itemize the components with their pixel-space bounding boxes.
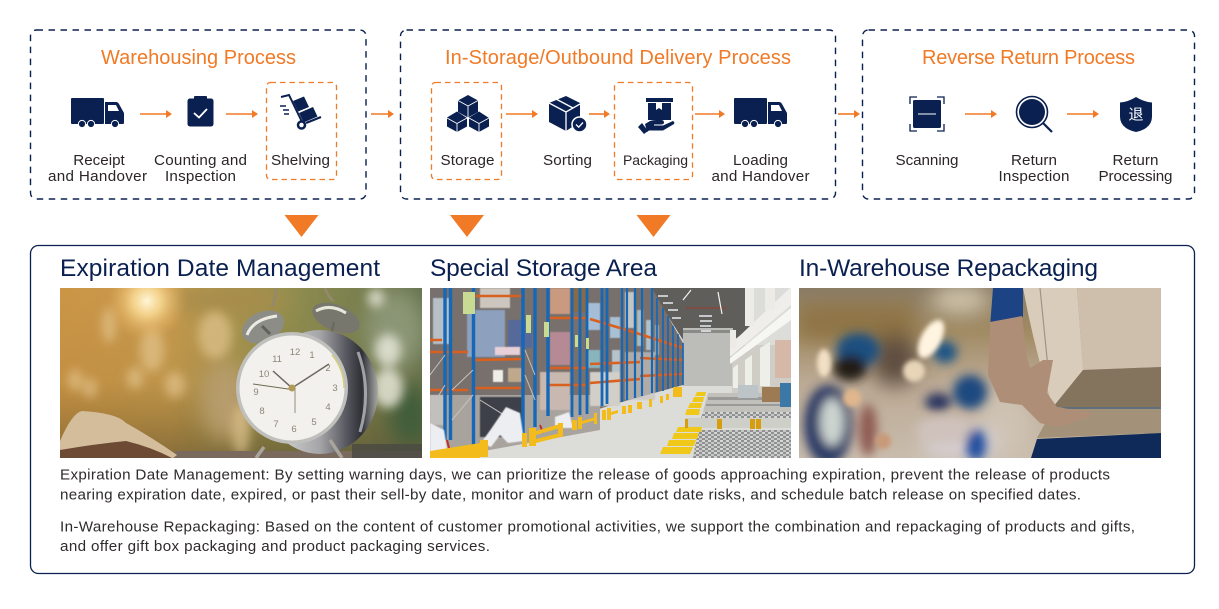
clock numerals: 4 bbox=[325, 402, 331, 413]
right balcony bbox=[730, 287, 791, 393]
text: in-warehouse repackaging: and offer gift box packaging and product packaging services. bbox=[60, 538, 490, 555]
photo: warehouse racks bbox=[430, 287, 791, 458]
red bases and shadow bbox=[447, 425, 543, 452]
icon: hand with box bbox=[638, 98, 674, 134]
label: receipt: Receipt bbox=[73, 152, 126, 169]
clock numerals: 6 bbox=[291, 424, 297, 435]
text: expiration date management: nearing expiration date, expired, or past their sell-by date, monitor and warn of product date risks, and schedule batch release on specified dates. bbox=[60, 486, 1081, 504]
burlap sack bbox=[60, 411, 177, 458]
arm and hand bbox=[988, 316, 1090, 427]
icon: clipboard check bbox=[188, 96, 214, 126]
table edge bbox=[175, 451, 352, 458]
text: in-warehouse repackaging: In-Warehouse Repackaging: Based on the content of customer promotional activities, we support the combination and repackaging of products and gifts, bbox=[60, 518, 1135, 536]
clock numerals: 9 bbox=[253, 387, 259, 398]
rack lattice bbox=[430, 350, 535, 425]
box bbox=[1023, 288, 1161, 438]
arrow bbox=[1067, 110, 1099, 118]
arrow bbox=[589, 110, 610, 118]
label: inspection: Inspection bbox=[165, 168, 236, 185]
rack signs bbox=[463, 292, 589, 349]
clock numerals: 11 bbox=[272, 354, 282, 365]
icon: scanner bbox=[910, 97, 944, 131]
highlight: storage bbox=[432, 82, 502, 180]
panel: value-added services bbox=[30, 246, 1194, 574]
clock numerals: 5 bbox=[311, 417, 317, 428]
label: loading: Loading bbox=[733, 152, 788, 169]
text: expiration date management: Expiration Date Management: By setting warning days, we can prioritize the release of goods approaching expiration, prevent the release of products bbox=[60, 466, 1110, 484]
clock numerals: 10 bbox=[259, 369, 269, 380]
yellow guards bbox=[430, 387, 682, 458]
label: return: Return bbox=[1112, 152, 1158, 169]
icon: shield return bbox=[1120, 97, 1152, 132]
label: packaging: Packaging bbox=[623, 152, 688, 168]
label: storage: Storage bbox=[440, 152, 494, 169]
label: inspection: Inspection bbox=[998, 168, 1070, 185]
clock numerals: 8 bbox=[259, 406, 265, 417]
arrow bbox=[140, 110, 172, 118]
pallet goods bbox=[430, 288, 659, 437]
label: counting: Counting and bbox=[154, 152, 247, 169]
text: in-warehouse repackaging bbox=[60, 518, 1135, 555]
rack mass bbox=[430, 288, 683, 408]
icon: magnifier bbox=[1016, 96, 1052, 132]
icon: box check bbox=[549, 96, 587, 132]
clock numerals: 1 bbox=[309, 350, 315, 361]
icon: cubes bbox=[447, 95, 489, 132]
arrow: to reverse return bbox=[838, 110, 860, 118]
panel: in-storage outbound bbox=[400, 30, 836, 199]
clock numerals bbox=[253, 347, 338, 435]
pointer: storage bbox=[450, 215, 484, 237]
label: and handover: and Handover bbox=[48, 168, 147, 185]
arrow bbox=[506, 110, 538, 118]
label: scanning: Scanning bbox=[896, 152, 958, 169]
plastic wrap bbox=[430, 407, 573, 455]
trousers bbox=[1031, 433, 1161, 458]
arrow bbox=[226, 110, 258, 118]
icon: truck loading bbox=[734, 98, 787, 128]
label: processing: Processing bbox=[1098, 168, 1172, 185]
panel: reverse return bbox=[862, 30, 1194, 199]
photo: worker carrying box bbox=[799, 286, 1161, 465]
pointer: packaging bbox=[636, 215, 670, 237]
label: shelving: Shelving bbox=[271, 152, 330, 169]
icon: shield return: 退 bbox=[1128, 106, 1144, 124]
icon: truck receipt bbox=[71, 98, 124, 128]
arrow: to in-storage bbox=[371, 110, 394, 118]
blue uprights bbox=[445, 288, 683, 445]
title: expiration: Expiration Date Management bbox=[60, 255, 380, 282]
clock numerals: 7 bbox=[273, 419, 279, 430]
shirt sleeve bbox=[990, 288, 1023, 322]
conveyor and boxes bbox=[660, 383, 791, 458]
icon: hand truck bbox=[280, 95, 321, 128]
clock body bbox=[236, 288, 378, 458]
clock numerals: 3 bbox=[332, 383, 338, 394]
arrow bbox=[965, 110, 997, 118]
label: and handover: and Handover bbox=[712, 168, 810, 185]
label: return: Return bbox=[1011, 152, 1057, 169]
highlight: shelving bbox=[266, 82, 336, 180]
photo: alarm clock bbox=[60, 288, 422, 458]
panel: warehousing process bbox=[30, 30, 366, 199]
heading: in-storage outbound: In-Storage/Outbound Delivery Process bbox=[445, 47, 791, 69]
highlight: packaging bbox=[614, 82, 692, 180]
arrow bbox=[695, 110, 725, 118]
text: expiration date management bbox=[60, 466, 1110, 504]
clock numerals: 12 bbox=[290, 347, 300, 358]
title: repackaging: In-Warehouse Repackaging bbox=[799, 255, 1098, 282]
heading: warehousing process: Warehousing Process bbox=[101, 47, 296, 69]
orange beams bbox=[430, 296, 683, 390]
ceiling and back wall bbox=[650, 288, 750, 386]
heading: reverse return: Reverse Return Process bbox=[922, 47, 1135, 69]
clock numerals: 2 bbox=[325, 363, 331, 374]
pointer: shelving bbox=[284, 215, 318, 237]
title: special storage: Special Storage Area bbox=[430, 255, 657, 282]
label: sorting: Sorting bbox=[543, 152, 592, 169]
